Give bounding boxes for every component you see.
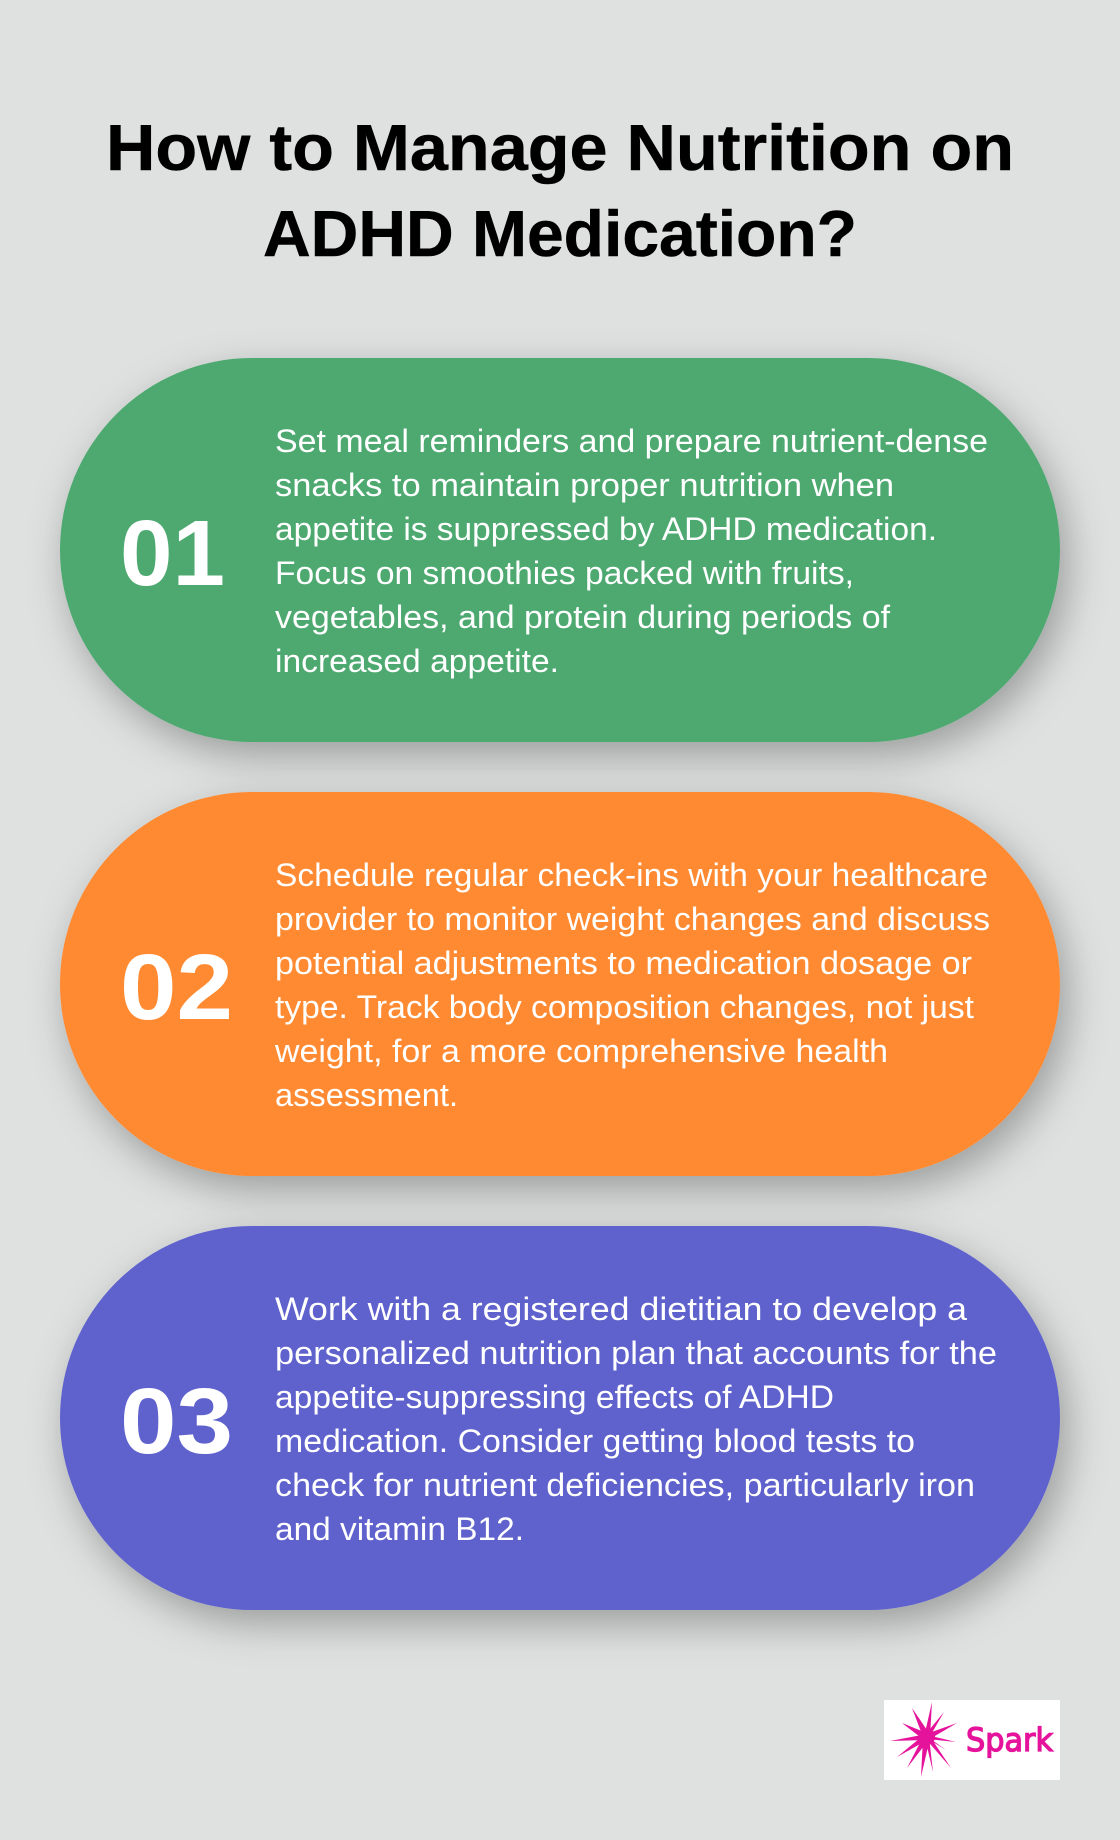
- text block: step 03: medication. Consider getting blood tests to: [275, 1423, 915, 1459]
- text block: step 01: Focus on smoothies packed with fruits,: [275, 555, 854, 591]
- number 03: 03: [120, 1369, 233, 1473]
- panel: step 03: [60, 1226, 1060, 1610]
- text block: step 02: Schedule regular check-ins with your healthcare: [275, 857, 988, 893]
- text block: step 03: Work with a registered dietitian to develop a: [275, 1291, 967, 1327]
- text block: step 02: type. Track body composition changes, not just: [275, 989, 974, 1025]
- logo: Spark: [884, 1700, 1060, 1780]
- panel background: green pill: [60, 358, 1060, 742]
- title: [106, 111, 1014, 270]
- text block: step 01: increased appetite.: [275, 643, 559, 679]
- text block: step 01: [275, 423, 988, 679]
- number 02: 02: [120, 935, 233, 1039]
- text block: step 01: vegetables, and protein during periods of: [275, 599, 890, 635]
- panel background: purple pill: [60, 1226, 1060, 1610]
- text block: step 02: potential adjustments to medication dosage or: [275, 945, 972, 981]
- text block: step 03: appetite-suppressing effects of ADHD: [275, 1379, 834, 1415]
- panel: step 01: [60, 358, 1060, 742]
- text block: step 01: Set meal reminders and prepare nutrient-dense: [275, 423, 988, 459]
- text block: step 02: assessment.: [275, 1077, 458, 1113]
- text block: step 02: [274, 857, 990, 1113]
- text block: step 01: snacks to maintain proper nutrition when: [275, 467, 894, 503]
- text block: step 03: [275, 1291, 997, 1547]
- text block: step 02: weight, for a more comprehensive health: [274, 1033, 888, 1069]
- logo wordmark: Spark: [966, 1721, 1053, 1759]
- icon: starburst: [890, 1702, 957, 1777]
- title: ADHD Medication?: [263, 197, 857, 270]
- text block: step 03: and vitamin B12.: [275, 1511, 524, 1547]
- text block: step 03: check for nutrient deficiencies, particularly iron: [275, 1467, 975, 1503]
- text block: step 03: personalized nutrition plan that accounts for the: [275, 1335, 997, 1371]
- text block: step 01: appetite is suppressed by ADHD medication.: [275, 511, 937, 547]
- number 01: 01: [120, 501, 225, 605]
- text block: step 02: provider to monitor weight changes and discuss: [275, 901, 990, 937]
- panel background: orange pill: [60, 792, 1060, 1176]
- panel: step 02: [60, 792, 1060, 1176]
- title: How to Manage Nutrition on: [106, 111, 1014, 184]
